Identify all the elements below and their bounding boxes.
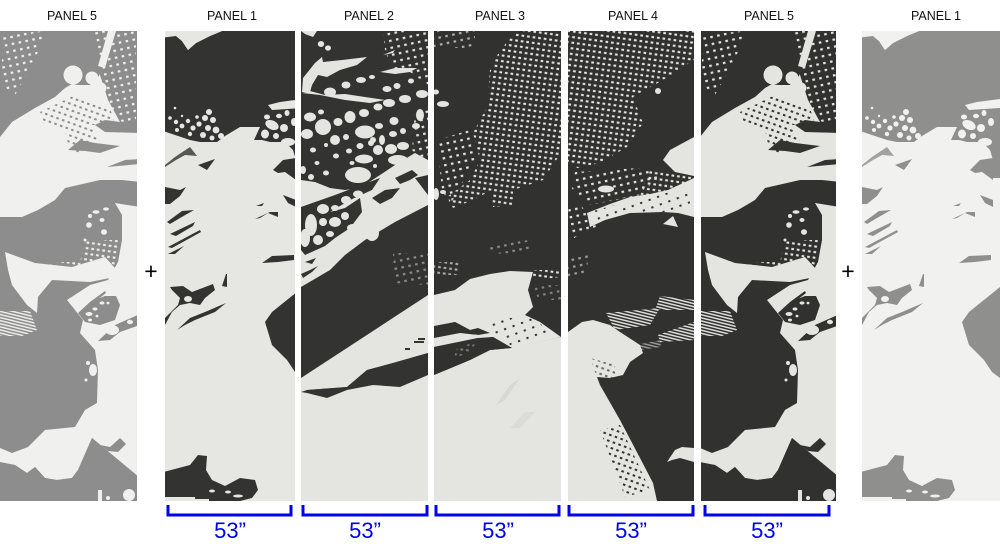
dimension: panel 4 [569, 505, 693, 543]
plus sign left: + [144, 258, 158, 284]
label: right repeat panel 1: PANEL 1 [911, 9, 961, 23]
dimension: panel 4: 53” [615, 518, 647, 543]
faded repeat of panel 1 at right [857, 31, 1000, 501]
label: left repeat panel 5: PANEL 5 [47, 9, 97, 23]
dimension: panel 5: 53” [751, 518, 783, 543]
dimension: panel 3 [436, 505, 559, 543]
dimension: panel 2 [303, 505, 427, 543]
panel 4 artwork [568, 31, 694, 501]
panel 5 artwork [695, 31, 840, 501]
label: panel 5: PANEL 5 [744, 9, 794, 23]
label: panel 3: PANEL 3 [475, 9, 525, 23]
dimension: panel 3: 53” [482, 518, 514, 543]
panel 1 artwork [165, 31, 295, 501]
panel 2 artwork [300, 31, 428, 501]
dimension: panel 1 [168, 505, 291, 543]
dimension: panel 2: 53” [349, 518, 381, 543]
faded repeat of panel 5 at left [0, 31, 140, 501]
label: panel 2: PANEL 2 [344, 9, 394, 23]
panel 3 artwork [433, 31, 561, 501]
dimension: panel 5 [705, 505, 829, 543]
label: panel 1: PANEL 1 [207, 9, 257, 23]
label: panel 4: PANEL 4 [608, 9, 658, 23]
plus sign right: + [841, 258, 855, 284]
dimension: panel 1: 53” [214, 518, 246, 543]
